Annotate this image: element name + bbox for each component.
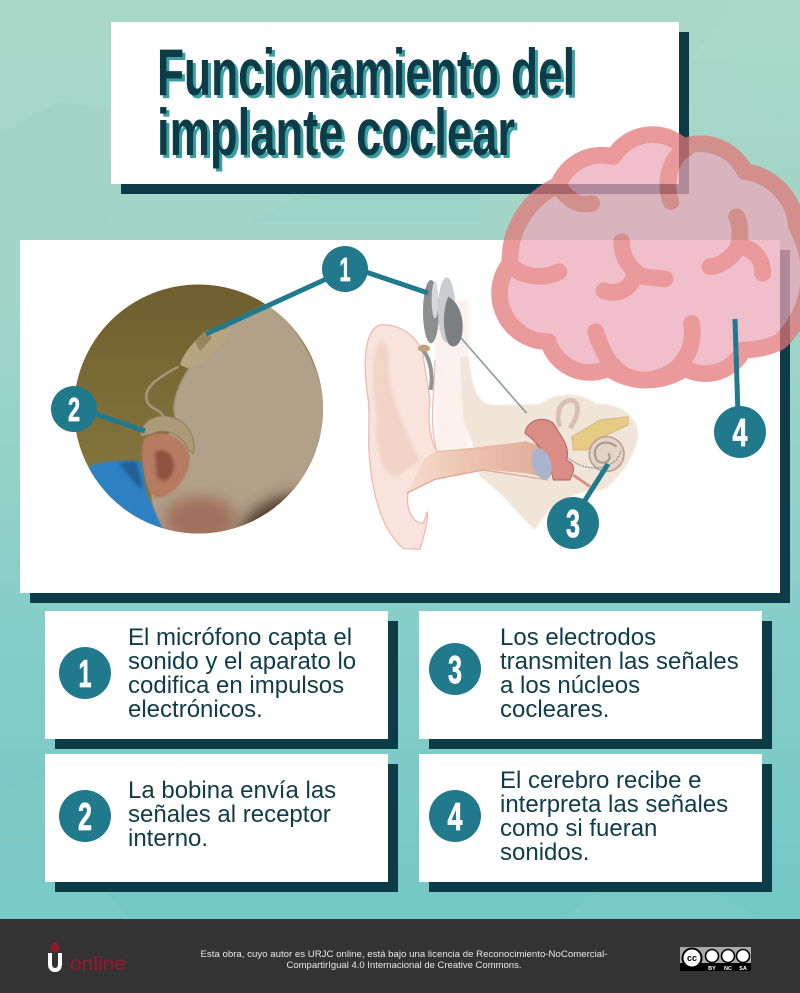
cable: [146, 367, 178, 417]
semicircular canals: [558, 400, 577, 428]
canal rim: [407, 470, 548, 493]
card 4: interpreta las señales: [500, 791, 728, 818]
skin line: [432, 360, 437, 451]
card 1: El micrófono capta el: [128, 624, 352, 651]
ear: [142, 433, 190, 498]
head slice: [435, 300, 468, 450]
internal magnet: [438, 277, 455, 343]
behind-the-ear processor: [141, 416, 194, 453]
card 3: a los núcleos: [500, 672, 640, 699]
callout line 2: [90, 412, 145, 431]
cochlea: [589, 437, 624, 471]
creative commons badge: cc: [687, 953, 697, 963]
title: Funcionamiento del: [157, 35, 575, 109]
card 2: [45, 754, 398, 892]
ear anatomy illustration: [365, 277, 638, 549]
creative commons badge: SA: [739, 966, 747, 972]
eardrum: [528, 446, 555, 482]
creative commons badge: NC: [724, 966, 732, 972]
callout 4: 4: [732, 412, 748, 455]
hook connector: [418, 345, 430, 352]
wire: [459, 336, 527, 413]
blue jacket: [88, 461, 163, 530]
brain: [500, 135, 800, 380]
inner ear: [155, 450, 174, 481]
card 2: 2: [78, 796, 92, 839]
logo: U online: [50, 942, 126, 975]
card 4: El cerebro recibe e: [500, 767, 701, 794]
card 4: [419, 754, 772, 892]
jacket shadow: [118, 462, 143, 490]
logo: U online: online: [70, 954, 126, 975]
callout 3: 3: [566, 503, 580, 546]
callout 1: 1: [340, 251, 350, 288]
receiver: [444, 297, 463, 346]
callout 4: [714, 406, 766, 458]
auditory nerve: [572, 417, 628, 450]
card 1: [45, 611, 398, 749]
canal top rim: [437, 442, 527, 451]
photo: child with cochlear implant: [76, 284, 323, 534]
concha shadow: [373, 340, 420, 477]
callout line 3: [582, 464, 608, 505]
card 3: [419, 611, 772, 749]
bone: [460, 357, 638, 530]
callout 1: [322, 246, 368, 292]
pinna: [365, 325, 437, 549]
lower head shading: [232, 484, 296, 528]
footer: [0, 919, 800, 993]
head: [150, 303, 327, 540]
coil detail: [195, 330, 212, 352]
card 1: codifica en impulsos: [128, 672, 344, 699]
card 3: transmiten las señales: [500, 648, 739, 675]
title: [157, 35, 575, 169]
ear canal: [408, 442, 550, 492]
middle ear: [525, 419, 574, 480]
licence text: Esta obra, cuyo autor es URJC online, está bajo una licencia de Reconocimiento-NoComercial-: [200, 949, 608, 960]
card 1: 1: [78, 653, 92, 696]
main illustration panel: [20, 240, 790, 603]
coil highlight: [432, 282, 438, 318]
title panel: [111, 22, 689, 194]
coil: [180, 329, 232, 368]
lower tube: [573, 475, 590, 487]
cochlea spiral: [595, 443, 617, 463]
title: implante coclear: [157, 95, 515, 169]
card 3: Los electrodos: [500, 624, 656, 651]
callout 2: [51, 386, 97, 432]
card 4: como si fueran: [500, 815, 657, 842]
licence text: CompartirIgual 4.0 Internacional de Creative Commons.: [287, 960, 521, 971]
neck and cheek shading: [163, 497, 237, 543]
callout 2: 2: [68, 391, 80, 428]
electrode lead: [567, 450, 622, 468]
creative commons badge: BY: [708, 966, 716, 972]
creative commons badge: [680, 947, 751, 972]
card 1: electrónicos.: [128, 696, 263, 723]
external coil: [423, 280, 439, 343]
card 2: La bobina envía las: [128, 777, 336, 804]
card 4: sonidos.: [500, 839, 589, 866]
callout line 4: [735, 319, 738, 415]
card 3: cocleares.: [500, 696, 609, 723]
callout line 1: [206, 270, 428, 334]
card 2: interno.: [128, 825, 208, 852]
card 3: 3: [448, 649, 462, 692]
card 1: sonido y el aparato lo: [128, 648, 356, 675]
card 2: señales al receptor: [128, 801, 331, 828]
callout 3: [547, 497, 599, 549]
card 4: 4: [448, 796, 463, 839]
hook: [423, 350, 432, 390]
